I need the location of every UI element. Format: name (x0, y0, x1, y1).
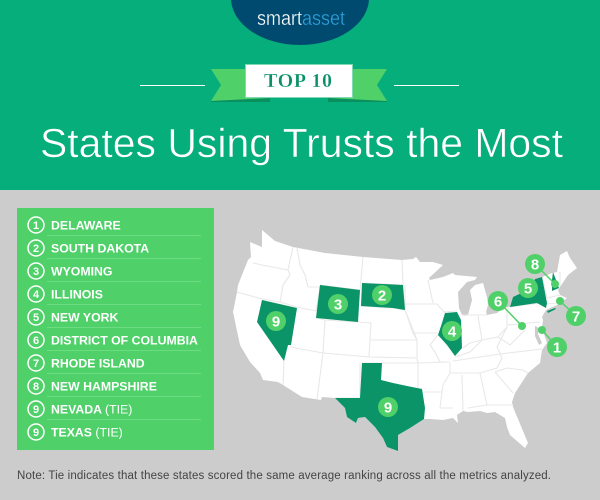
list item 1: DELAWARE (51, 218, 121, 232)
state: Illinois (438, 312, 462, 356)
marker: Rhode Island 7 (556, 297, 586, 326)
state: New Hampshire (552, 272, 559, 291)
marker: New Hampshire 8: 8 (531, 256, 539, 274)
list item 4: ILLINOIS (51, 288, 103, 302)
marker: Wyoming 3 (328, 294, 348, 314)
state: Rhode Island (547, 308, 556, 313)
list item 5 (28, 309, 119, 325)
panel: ranked list (17, 208, 214, 450)
list item 4: 4 (33, 289, 40, 301)
marker: District of Columbia 6: 6 (494, 294, 502, 310)
marker: Delaware 1 (538, 326, 567, 357)
map outline (233, 230, 577, 451)
list item 5: NEW YORK (51, 310, 119, 324)
list item 3: 3 (33, 266, 39, 278)
list item 2: 2 (33, 243, 39, 255)
marker: Texas 9: 9 (384, 400, 392, 416)
list item 10 (28, 424, 123, 440)
state: New York (510, 277, 547, 308)
marker: Texas 9 (378, 397, 398, 417)
list item 9: 9 (33, 404, 39, 416)
list item 2: SOUTH DAKOTA (51, 242, 149, 256)
footnote: Note: Tie indicates that these states scored the same average ranking across all the metrics analyzed. (17, 470, 551, 482)
list item 3: WYOMING (51, 264, 112, 278)
state: Wyoming (316, 285, 360, 322)
marker: Delaware 1: 1 (553, 340, 561, 356)
state: South Dakota (361, 283, 405, 310)
state: Nevada (257, 300, 297, 361)
logo badge (231, 0, 369, 45)
list item 8: 8 (33, 381, 39, 393)
marker: Illinois 4: 4 (448, 324, 457, 340)
list item 9: NEVADA (TIE) (51, 402, 132, 416)
list item 6: DISTRICT OF COLUMBIA (51, 334, 198, 348)
logo badge: asset (302, 8, 345, 30)
list item 4 (28, 286, 103, 302)
header band (0, 0, 600, 190)
marker: New York 5: 5 (524, 280, 532, 298)
list item 10: 9 (33, 427, 39, 439)
list item 7: 7 (33, 358, 39, 370)
marker: South Dakota 2 (372, 285, 392, 305)
list item 3 (28, 263, 112, 279)
marker: Wyoming 3: 3 (334, 296, 342, 314)
list item 1 (28, 217, 121, 233)
title: States Using Trusts the Most (40, 120, 564, 166)
list item 1: 1 (33, 220, 39, 232)
ribbon banner (140, 64, 459, 102)
list item 6: 6 (33, 335, 39, 347)
marker: Nevada 9 (266, 311, 286, 331)
marker: Illinois 4 (442, 321, 462, 341)
marker: Nevada 9: 9 (272, 314, 280, 330)
US map (233, 230, 586, 451)
marker: New Hampshire 8 (525, 254, 559, 288)
list item 9 (28, 401, 132, 417)
marker: New York 5 (518, 278, 538, 298)
marker: District of Columbia 6 (488, 291, 526, 330)
ribbon label: TOP 10 (264, 70, 332, 92)
marker: Rhode Island 7: 7 (572, 308, 580, 326)
list item 10: TEXAS (TIE) (51, 426, 123, 440)
marker: South Dakota 2: 2 (378, 288, 386, 304)
list item 7: RHODE ISLAND (51, 356, 145, 370)
list item 8: NEW HAMPSHIRE (51, 380, 157, 394)
state: Texas (335, 363, 425, 451)
list item 5: 5 (33, 312, 39, 324)
logo badge: smart (257, 8, 302, 30)
water: Chesapeake Bay (535, 326, 542, 345)
